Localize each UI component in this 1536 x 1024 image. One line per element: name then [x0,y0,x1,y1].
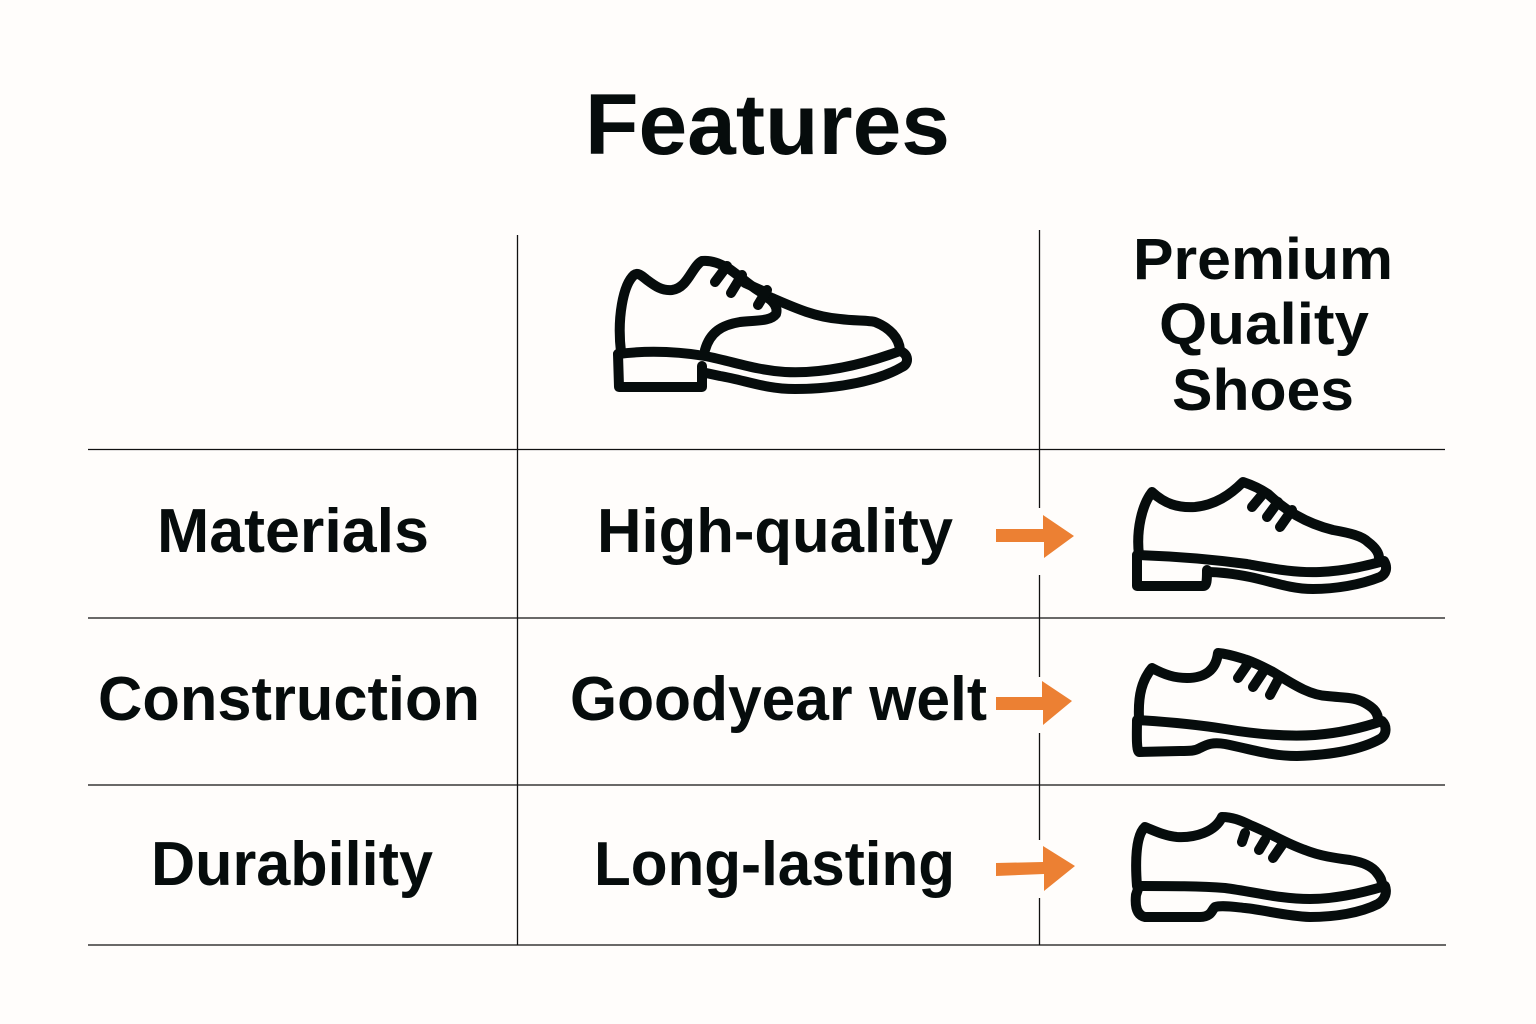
row: durability: Durability [151,830,434,899]
arrow: materials [996,515,1074,558]
arrow: durability [996,846,1075,891]
row: construction: Construction [98,665,480,734]
row: construction [98,653,1386,756]
arrow: construction [996,681,1072,725]
heading: Premium Quality Shoes: Quality [1159,292,1369,357]
icon: header shoe [618,261,907,389]
icon: durability shoe [1136,817,1386,917]
row: materials [157,482,1386,589]
title: Features [585,77,950,173]
icon: construction shoe [1137,653,1386,756]
icon: materials shoe [1137,482,1386,589]
heading: Premium Quality Shoes: Shoes [1172,358,1354,423]
row: materials: High-quality [597,497,954,566]
row: construction: Goodyear welt [570,665,987,734]
heading: Premium Quality Shoes [1133,227,1393,423]
row: materials: Materials [157,497,429,566]
row: durability: Long-lasting [594,830,955,899]
heading: Premium Quality Shoes: Premium [1133,227,1393,292]
row: durability [151,817,1386,917]
